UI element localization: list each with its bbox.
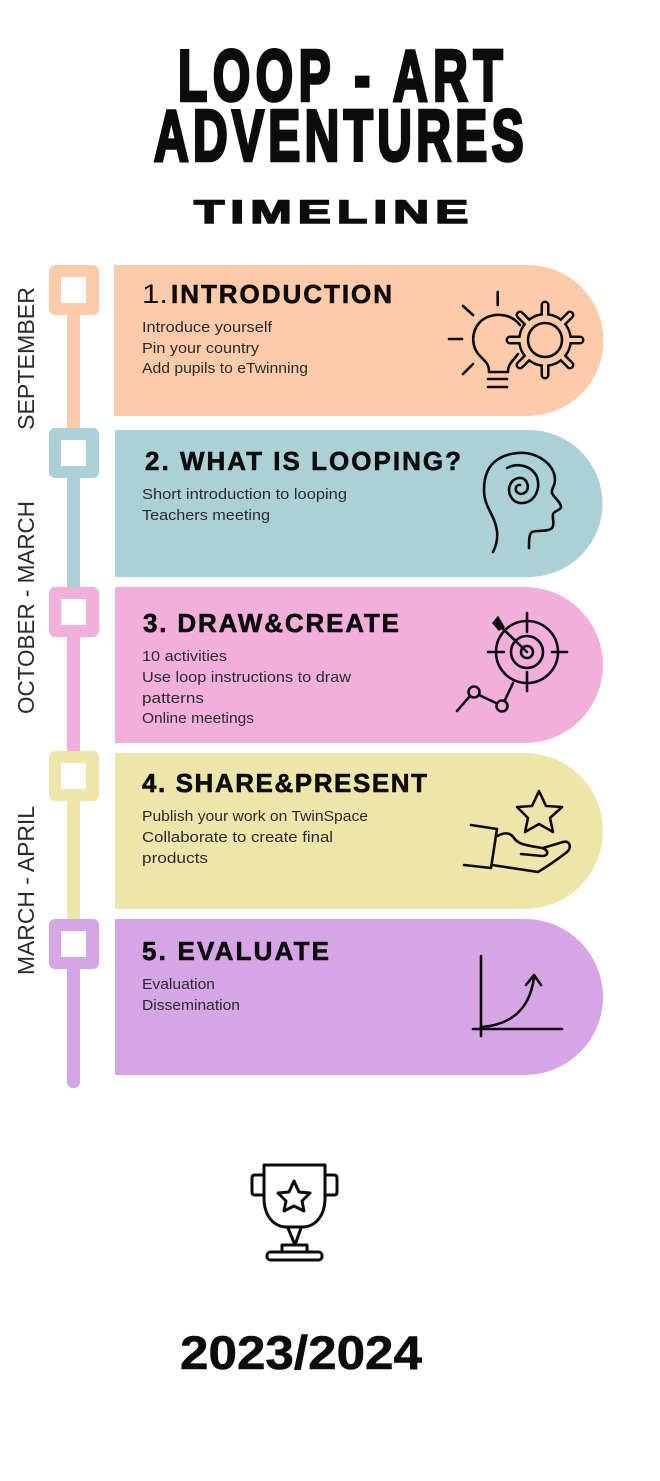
panel: 5 evaluate (115, 919, 603, 1075)
heading: draw and create: 3. DRAW&CREATE (143, 608, 399, 638)
text: draw and create activities: 10 activities (142, 648, 227, 665)
icon: growth curve chart (473, 956, 562, 1036)
panel: 2 what is looping (115, 430, 602, 577)
icon: hand holding star (464, 791, 570, 872)
text: looping activities (142, 486, 347, 524)
text: introduction activities: Introduce yourself (142, 319, 273, 336)
subtitle: timeline: TIMELINE (194, 194, 468, 230)
timeline rail (49, 265, 99, 1088)
heading: introduction: 1. (142, 279, 168, 309)
text: looping activities: Teachers meeting (142, 507, 270, 524)
heading: introduction: INTRODUCTION (171, 279, 392, 309)
heading: evaluate: 5. EVALUATE (142, 936, 329, 966)
month label: October - March: OCTOBER - MARCH (13, 501, 39, 714)
icon: light bulb and gear (449, 292, 580, 387)
heading: what is looping: 2. WHAT IS LOOPING? (145, 446, 461, 476)
text: evaluate activities: Evaluation (142, 976, 215, 993)
text: evaluate activities: Dissemination (142, 997, 240, 1014)
text: draw and create activities: Use loop instructions to draw (142, 669, 351, 686)
text: evaluate activities (142, 976, 240, 1014)
text: introduction activities: Pin your country (142, 340, 260, 357)
date: 2023/2024: 2023/2024 (180, 1326, 422, 1379)
panel: 1 introduction (114, 265, 604, 416)
text: share and present activities (142, 808, 368, 867)
panel: 4 share and present (115, 753, 603, 909)
text: looping activities: Short introduction to looping (142, 486, 347, 503)
text: share and present activities: Publish your work on TwinSpace (142, 808, 368, 825)
text: draw and create activities: Online meetings (142, 710, 254, 727)
text: share and present activities: products (142, 850, 208, 867)
icon: trophy (252, 1165, 337, 1260)
month label: March - April: MARCH - APRIL (13, 806, 39, 975)
heading: share and present: 4. SHARE&PRESENT (142, 768, 427, 798)
title (154, 36, 524, 177)
text: share and present activities: Collaborate to create final (142, 829, 333, 846)
icon: target with arrow and line chart (457, 613, 567, 712)
month label: September: SEPTEMBER (13, 287, 39, 430)
panel: 3 draw and create (115, 587, 603, 743)
text: introduction activities: Add pupils to eTwinning (142, 360, 308, 377)
text: introduction activities (142, 319, 308, 377)
icon: head with spiral (484, 453, 561, 552)
text: draw and create activities (142, 648, 351, 727)
title: ADVENTURES (154, 96, 524, 177)
text: draw and create activities: patterns (142, 690, 204, 707)
title: LOOP - ART (178, 36, 503, 117)
